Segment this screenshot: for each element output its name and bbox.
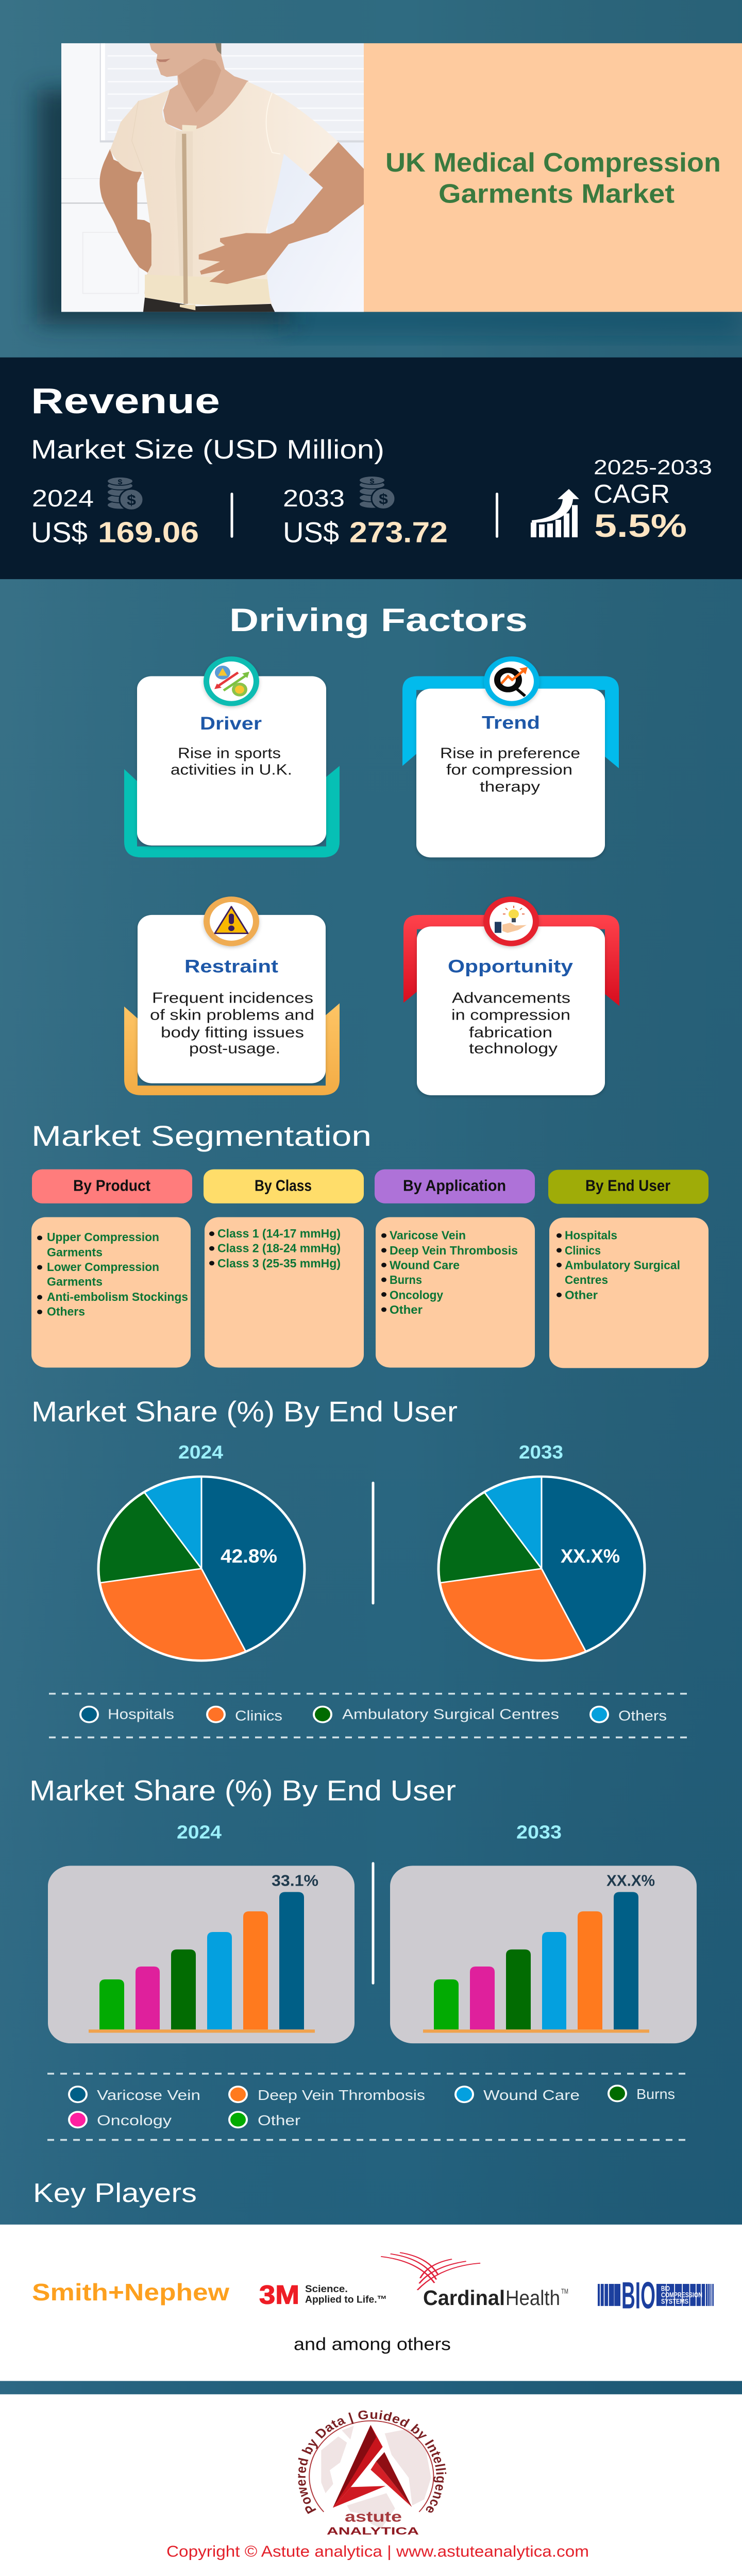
title: Garments Market xyxy=(439,179,674,209)
copyright: Copyright © Astute analytica | www.astuteanalytica.com xyxy=(166,2543,589,2560)
legend: end user: Ambulatory Surgical Centres xyxy=(342,1706,559,1722)
list box xyxy=(376,1217,535,1367)
tab label: By Class xyxy=(255,1177,312,1194)
list: Garments xyxy=(47,1276,103,1289)
description: of skin problems and xyxy=(150,1007,314,1023)
logo: BIO Compression Systems: BIO xyxy=(621,2275,655,2316)
list xyxy=(209,1227,341,1270)
panel: by product xyxy=(31,1170,192,1367)
panel: by class xyxy=(204,1170,364,1367)
label: Driver xyxy=(200,714,262,734)
label: Opportunity xyxy=(448,956,574,976)
icon: hand and light bulb xyxy=(483,896,539,946)
logo: Cardinal Health: Cardinal xyxy=(423,2286,505,2310)
description xyxy=(440,745,580,795)
value 2024: 2024 xyxy=(32,485,94,512)
list: Deep Vein Thrombosis xyxy=(390,1244,518,1257)
pie chart 2033: XX.X% xyxy=(561,1546,620,1567)
description: for compression xyxy=(446,762,572,778)
list: Clinics xyxy=(565,1244,601,1257)
icon: coins: $ xyxy=(379,492,388,507)
divider xyxy=(372,1482,374,1604)
tab label: By End User xyxy=(585,1177,670,1194)
panel: by application xyxy=(375,1170,535,1367)
list: Lower Compression xyxy=(47,1261,159,1274)
tab label: By Product xyxy=(73,1177,150,1194)
logo: Cardinal Health: TM xyxy=(561,2287,568,2296)
logo: BIO Compression Systems: BIO xyxy=(661,2285,670,2293)
description: fabrication xyxy=(469,1025,552,1041)
heading: market segmentation: Market Segmentation xyxy=(31,1121,372,1152)
value 2033: US$ xyxy=(283,517,339,549)
list: Upper Compression xyxy=(47,1231,159,1244)
legend: application: Other xyxy=(258,2113,300,2129)
logo: BIO Compression Systems xyxy=(598,2275,714,2316)
divider xyxy=(231,493,233,538)
heading: key players: Key Players xyxy=(33,2178,197,2208)
list: Other xyxy=(565,1289,598,1302)
list: Anti-embolism Stockings xyxy=(47,1291,188,1304)
label: 2024: 2024 xyxy=(177,1823,222,1843)
icon: growth chart xyxy=(531,489,579,537)
panel: driver xyxy=(124,656,340,857)
label: 2033: 2033 xyxy=(516,1823,562,1843)
bar chart 2033 xyxy=(390,1866,697,2043)
description xyxy=(451,990,570,1057)
icon: coins xyxy=(107,477,143,510)
logo: Cardinal Health xyxy=(381,2252,568,2310)
icon: coins: $ xyxy=(370,477,375,485)
panel: key players logos xyxy=(0,2225,742,2381)
panel: revenue xyxy=(0,358,742,579)
list: Other xyxy=(390,1303,423,1317)
CAGR block xyxy=(594,456,712,544)
list xyxy=(381,1229,518,1317)
panel: by end user xyxy=(548,1170,709,1368)
list: Ambulatory Surgical xyxy=(565,1259,680,1272)
tab xyxy=(32,1170,192,1204)
legend: application: Wound Care xyxy=(483,2087,580,2103)
description: in compression xyxy=(451,1007,570,1023)
legend: application: Deep Vein Thrombosis xyxy=(258,2087,425,2103)
list: Garments xyxy=(47,1246,103,1259)
description: Frequent incidences xyxy=(152,990,313,1006)
tab xyxy=(548,1170,709,1204)
description xyxy=(150,990,314,1057)
hero photo: man in compression garment xyxy=(61,43,364,312)
description: Advancements xyxy=(452,990,570,1006)
title xyxy=(385,147,721,209)
heading: market share by end user (bars): Market Share (%) By End User xyxy=(29,1775,456,1807)
panel: opportunity xyxy=(403,896,619,1095)
icon: driver gears and arrows xyxy=(204,656,259,706)
icon: trend magnifier xyxy=(484,656,539,706)
list: Oncology xyxy=(390,1289,443,1302)
logo: BIO Compression Systems: COMPRESSION xyxy=(661,2292,702,2299)
list: Class 1 (14-17 mmHg) xyxy=(217,1227,341,1240)
tab xyxy=(375,1170,535,1204)
label: 2033: 2033 xyxy=(519,1443,563,1463)
logo: 3M xyxy=(259,2280,387,2310)
value 2033: 273.72 xyxy=(349,516,448,549)
list: Class 3 (25-35 mmHg) xyxy=(217,1257,341,1270)
label: Restraint xyxy=(184,956,278,976)
list: Hospitals xyxy=(565,1229,617,1242)
panel: footer xyxy=(0,2394,742,2576)
list: Class 2 (18-24 mmHg) xyxy=(217,1242,341,1255)
pie chart 2033 xyxy=(439,1477,645,1660)
title: UK Medical Compression xyxy=(385,147,721,177)
value 2024: US$ xyxy=(31,517,88,549)
legend: end user: Clinics xyxy=(235,1708,282,1724)
list box xyxy=(205,1217,364,1367)
bar chart 2024: 33.1% xyxy=(272,1872,318,1889)
description: therapy xyxy=(480,779,541,795)
list: Burns xyxy=(390,1274,422,1287)
panel: trend xyxy=(402,656,619,857)
value 2024 xyxy=(31,485,199,549)
description: technology xyxy=(469,1041,558,1057)
CAGR block: 5.5% xyxy=(594,507,687,544)
list xyxy=(37,1231,188,1318)
logo: BIO Compression Systems: SYSTEMS xyxy=(661,2298,688,2306)
value 2033 xyxy=(283,485,448,549)
legend: end user: Others xyxy=(618,1708,667,1724)
title panel xyxy=(364,43,742,312)
logo: Astute Analytica: ANALYTICA xyxy=(327,2525,419,2537)
logo: Astute Analytica: Powered by Data | Guided by Intelligence xyxy=(298,2410,446,2514)
value 2024: 169.06 xyxy=(98,516,199,549)
legend: application: Varicose Vein xyxy=(97,2087,200,2103)
logo: 3M: 3M xyxy=(259,2280,299,2310)
list: Centres xyxy=(565,1274,608,1287)
logo: Cardinal Health: Health xyxy=(505,2286,560,2310)
bar chart 2033: XX.X% xyxy=(606,1872,655,1889)
logo: Astute Analytica: astute xyxy=(345,2509,402,2525)
icon: coins xyxy=(359,476,395,509)
pie chart 2024: 42.8% xyxy=(221,1546,277,1567)
list: Others xyxy=(47,1306,85,1318)
tab xyxy=(204,1170,364,1204)
icon: warning triangle xyxy=(204,896,259,946)
list xyxy=(556,1229,680,1302)
list box xyxy=(31,1217,191,1367)
CAGR block: CAGR xyxy=(594,480,670,509)
logo: 3M: Applied to Life.™ xyxy=(305,2294,387,2305)
list box xyxy=(549,1217,709,1368)
legend: application: Oncology xyxy=(97,2113,172,2129)
list: Wound Care xyxy=(390,1259,460,1272)
legend: application xyxy=(69,2086,675,2129)
legend: end user xyxy=(80,1706,667,1724)
description: Rise in preference xyxy=(440,745,580,761)
legend: application: Burns xyxy=(636,2087,675,2103)
pie chart 2024 xyxy=(98,1477,305,1660)
divider xyxy=(372,1862,374,1985)
tab label: By Application xyxy=(403,1177,506,1194)
list: Varicose Vein xyxy=(390,1229,466,1242)
description: body fitting issues xyxy=(161,1025,304,1041)
label: Trend xyxy=(482,713,540,733)
legend: end user: Hospitals xyxy=(108,1706,174,1722)
heading: driving factors: Driving Factors xyxy=(229,602,528,638)
description: post-usage. xyxy=(189,1041,280,1057)
description: activities in U.K. xyxy=(171,762,292,778)
market size label: Market Size (USD Million) xyxy=(31,434,384,464)
panel: restraint xyxy=(124,896,340,1095)
caption: and among others xyxy=(294,2334,451,2354)
description: Rise in sports xyxy=(178,745,281,761)
icon: coins: $ xyxy=(127,493,136,509)
label: 2024: 2024 xyxy=(178,1443,223,1463)
description xyxy=(171,745,292,778)
logo: Smith+Nephew: Smith+Nephew xyxy=(32,2279,230,2306)
value 2033: 2033 xyxy=(283,485,345,512)
heading: market share by end user (pie): Market Share (%) By End User xyxy=(31,1396,458,1428)
panel: hero xyxy=(37,43,742,324)
heading: revenue: Revenue xyxy=(31,381,220,421)
bar chart 2024 xyxy=(48,1866,355,2043)
CAGR block: 2025-2033 xyxy=(594,456,712,479)
divider xyxy=(496,493,498,538)
logo: 3M: Science. xyxy=(305,2283,348,2295)
icon: coins: $ xyxy=(118,478,123,486)
